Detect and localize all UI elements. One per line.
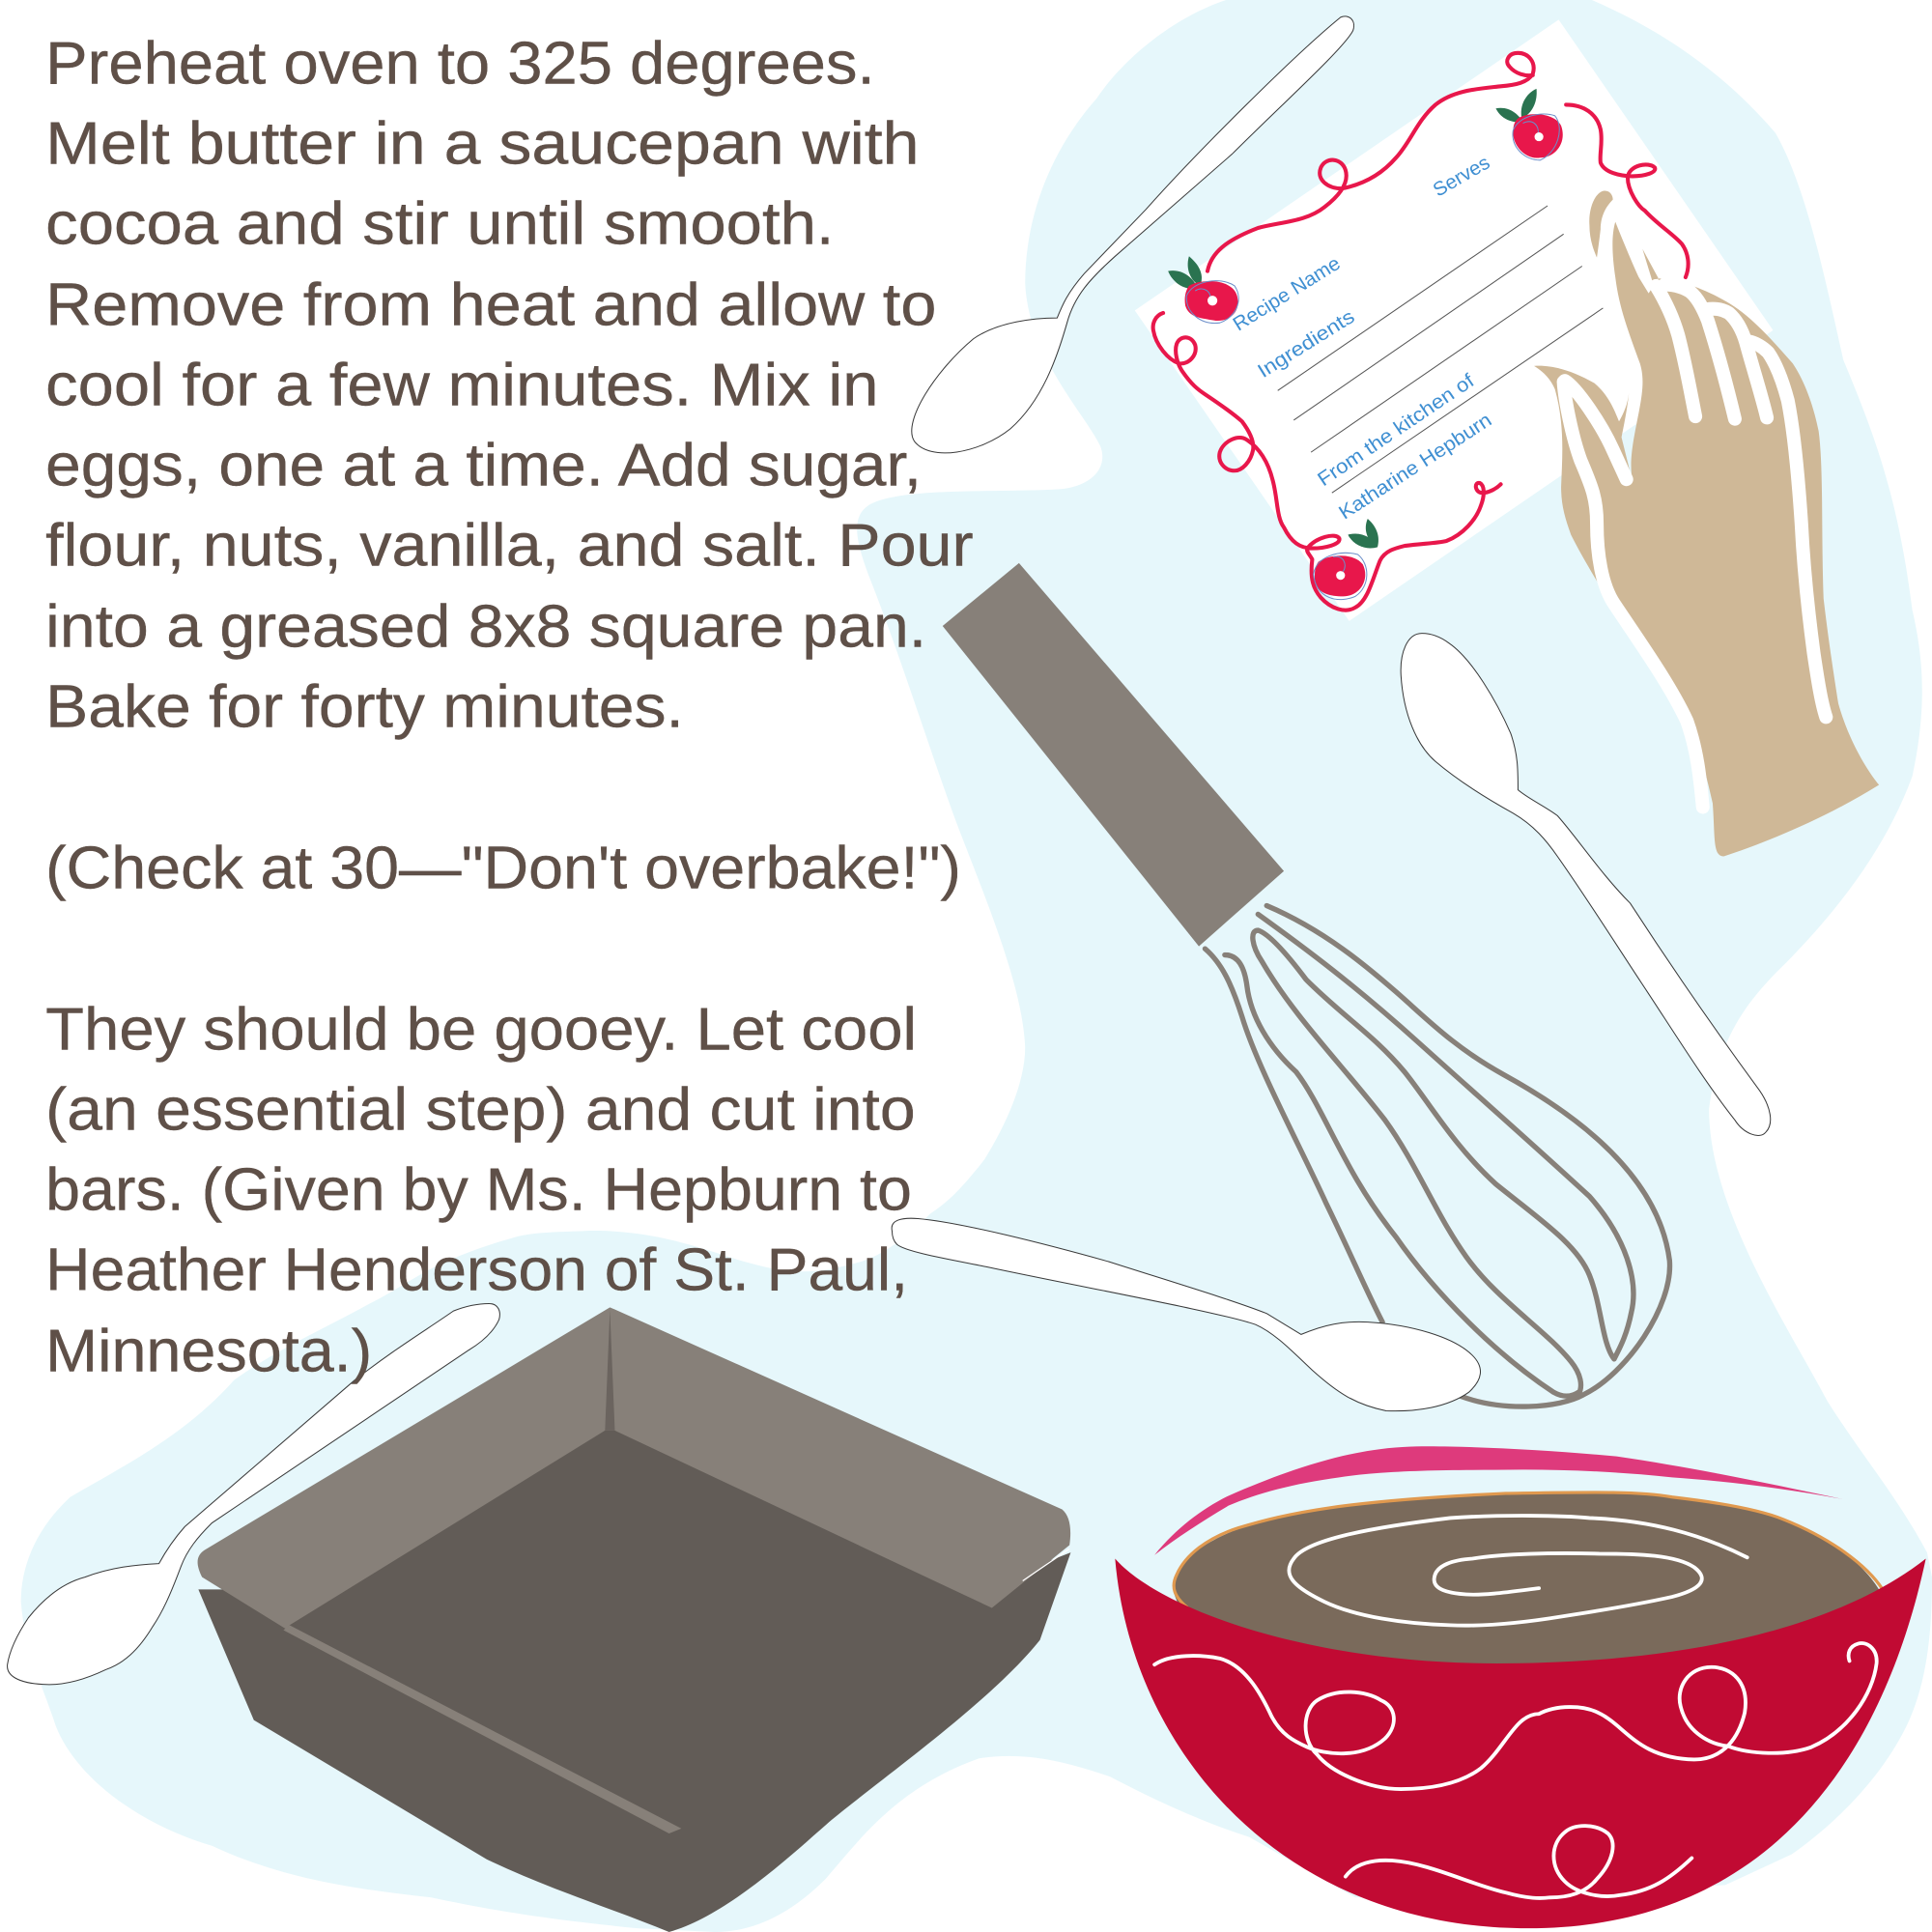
recipe text [45,30,974,1385]
baking note: (Check at 30—"Don't overbake!") [45,835,961,902]
card labels: Recipe Name [1230,253,1345,335]
batter surface [1173,1492,1886,1682]
card labels: Serves [1430,152,1493,201]
pan front rim strip [283,1625,681,1833]
card labels: Ingredients [1254,306,1358,383]
batter spiral [1289,1516,1747,1626]
closing paragraph: (an essential step) and cut into [45,1076,916,1144]
batter edge [1174,1492,1883,1608]
card paper [1135,19,1773,621]
method paragraph: eggs, one at a time. Add sugar, [45,432,922,499]
card labels: Katharine Hepburn [1335,410,1495,524]
cherry: left [1168,256,1238,324]
bowl squiggle upper [1154,1643,1877,1789]
closing paragraph: They should be gooey. Let cool [45,996,917,1064]
method paragraph: Remove from heat and allow to [45,271,936,339]
closing paragraph: Minnesota.) [45,1318,372,1385]
hand holding card [1534,191,1879,856]
whisk [943,563,1670,1406]
pan back walls [198,1307,1070,1629]
whisk handle [943,563,1284,947]
method paragraph: into a greased 8x8 square pan. [45,593,926,661]
method paragraph [45,30,974,741]
card labels: From the kitchen of [1314,370,1479,491]
spoon: across whisk [892,1218,1481,1411]
finger highlights [1564,285,1826,807]
card labels [1230,152,1495,524]
bowl squiggle lower [1346,1826,1691,1898]
method paragraph: cool for a few minutes. Mix in [45,352,878,419]
method paragraph: Melt butter in a saucepan with [45,110,920,178]
red swirl border [1153,53,1689,611]
method paragraph: flour, nuts, vanilla, and salt. Pour [45,511,974,579]
closing paragraph [45,996,917,1385]
spoon: by pan [8,1303,499,1685]
method paragraph: Preheat oven to 325 degrees. [45,30,875,98]
whisk wires [1205,906,1670,1406]
closing paragraph: bars. (Given by Ms. Hepburn to [45,1156,912,1224]
finger sliver [1642,249,1659,281]
method paragraph: Bake for forty minutes. [45,673,684,741]
method paragraph: cocoa and stir until smooth. [45,190,835,258]
pan right corner glint [1023,1548,1069,1580]
card ruled lines [1278,206,1603,493]
pan corner crease [605,1310,614,1431]
spoon: top [912,16,1354,453]
recipe card [1135,19,1773,621]
baking pan [198,1307,1070,1932]
cherry: bottom [1314,519,1378,600]
pan floor and front walls [198,1405,1070,1932]
pink swoosh [1154,1446,1844,1555]
hand silhouette [1534,222,1879,856]
mixing bowl [1115,1446,1926,1928]
spoon: right [1401,634,1771,1135]
closing paragraph: Heather Henderson of St. Paul, [45,1236,908,1303]
fingertip [1589,191,1613,258]
bowl body [1115,1559,1926,1928]
cherry: top right [1495,89,1563,160]
